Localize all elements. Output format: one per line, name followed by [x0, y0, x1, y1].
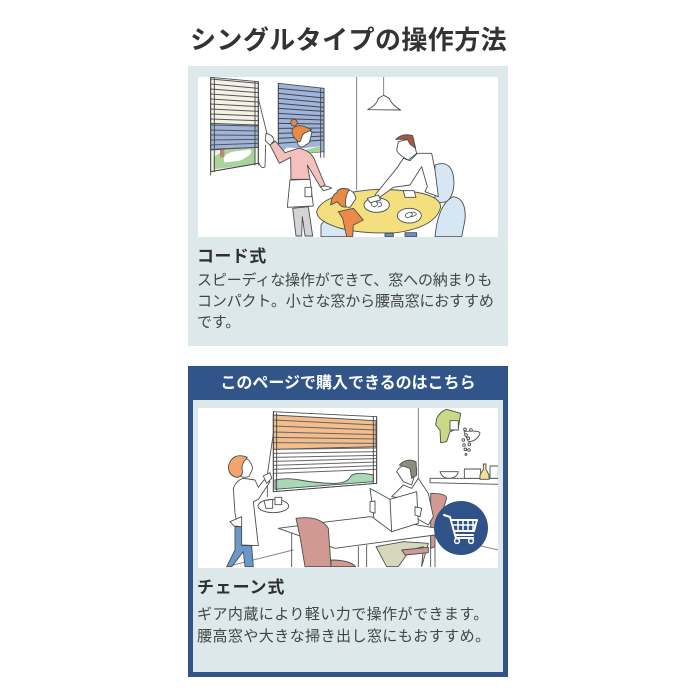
text: chain type description: [197, 606, 491, 645]
panel: chain type: [188, 366, 508, 677]
panel: cord type: [188, 66, 508, 346]
blind: [273, 412, 377, 492]
left window: [211, 77, 258, 172]
panel body: [193, 400, 503, 672]
right window: [278, 83, 324, 155]
wall and lamp: [357, 77, 384, 190]
title: シングルタイプの操作方法: [190, 25, 507, 55]
plant and shelf: [436, 409, 461, 443]
text: cord type description: [197, 272, 494, 331]
heading: cord type: コード式: [197, 247, 267, 266]
heading: purchasable banner: このページで購入できるのはこちら: [220, 375, 476, 392]
table: [278, 517, 437, 548]
man's hands: [403, 191, 416, 197]
wall lines: [227, 408, 498, 567]
table: [317, 189, 441, 233]
chain: [267, 433, 273, 497]
illustration: couple at table with chain blind: [198, 408, 498, 568]
chairs: [435, 164, 454, 203]
heading: chain type: チェーン式: [197, 578, 285, 597]
text: chain type description: 腰高窓や大きな掃き出し窓にもおすすめ。: [197, 628, 491, 645]
text: cord type description: です。: [197, 314, 240, 331]
text: chain type description: ギア内蔵により軽い力で操作ができます。: [197, 606, 489, 623]
newspaper: [370, 488, 418, 532]
cord: [258, 98, 267, 168]
girl: [343, 190, 356, 207]
text: cord type description: コンパクト。小さな窓から腰高窓におすすめ: [197, 293, 494, 310]
near chair: [296, 518, 331, 567]
man: [392, 478, 433, 525]
woman: [233, 478, 270, 546]
chair behind man: [431, 493, 447, 548]
woman: [287, 179, 313, 207]
text: cord type description: スピーディな操作ができて、窓への納まりも: [197, 272, 492, 289]
man: [397, 138, 417, 160]
icon: shopping cart: [434, 501, 488, 555]
man's legs under the table: [376, 542, 428, 567]
illustration: family at table with cord blinds: [198, 77, 498, 237]
